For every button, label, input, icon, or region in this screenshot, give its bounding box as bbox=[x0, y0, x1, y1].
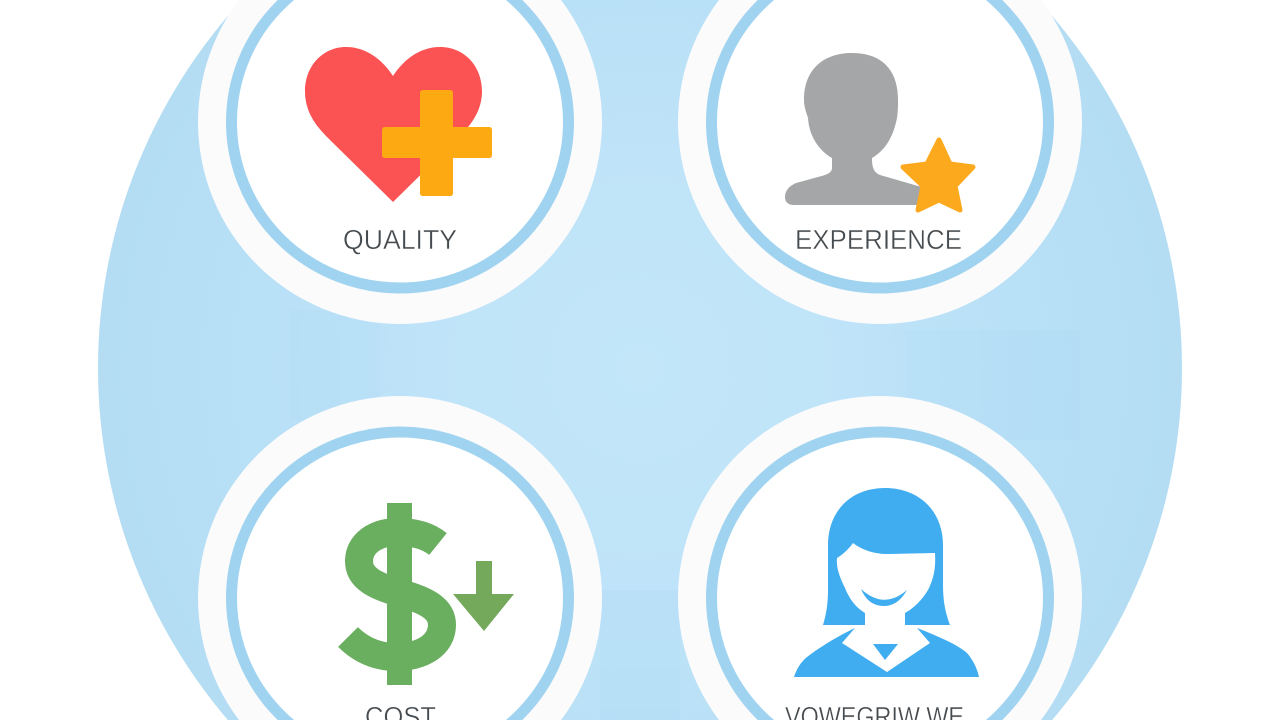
icon: heart with plus bbox=[305, 47, 492, 202]
label: experience: EXPERIENCE bbox=[795, 224, 962, 255]
panel: cost bbox=[198, 396, 602, 720]
icon: woman smiling bbox=[794, 488, 979, 677]
panel: quality bbox=[198, 0, 602, 324]
panel: experience bbox=[678, 0, 1082, 324]
icon: person with star bbox=[785, 53, 973, 210]
icon: dollar with down arrow bbox=[348, 503, 514, 685]
panel: workforce bbox=[678, 396, 1082, 720]
label: quality: QUALITY bbox=[343, 224, 457, 255]
